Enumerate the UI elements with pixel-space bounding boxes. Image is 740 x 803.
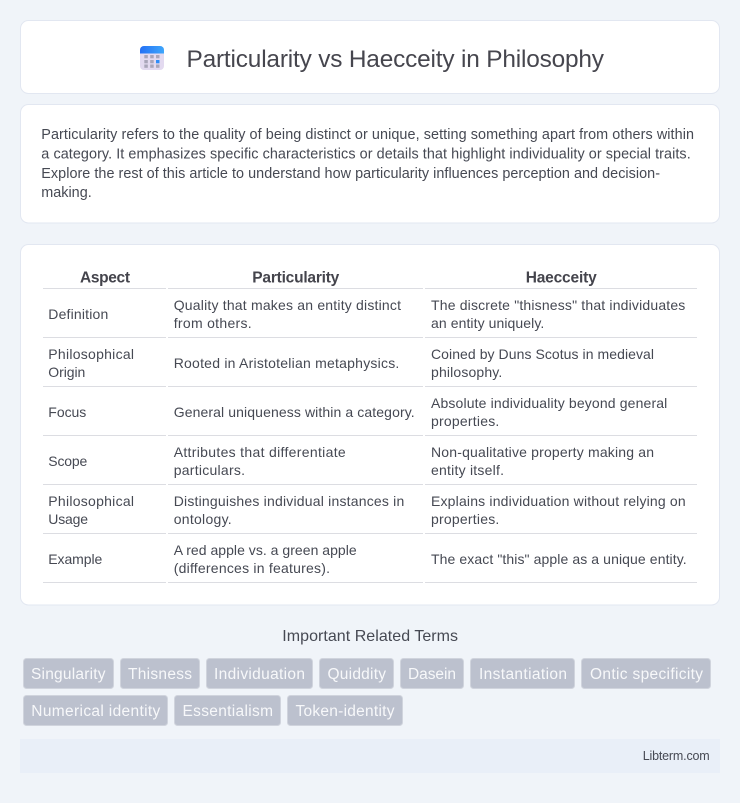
tag: Essentialism — [174, 696, 280, 726]
panel: header — [20, 20, 720, 94]
table row: Focus: Focus — [48, 404, 86, 420]
table row: Philosophical Usage: ontology. — [174, 511, 232, 527]
table row: Scope — [43, 444, 697, 485]
table header row — [43, 270, 697, 289]
table header row: Haecceity — [526, 270, 597, 286]
tag: Individuation: Individuation — [214, 666, 305, 683]
tag: Singularity — [24, 658, 114, 688]
table row: Example: (differences in features). — [174, 560, 330, 576]
table row: Philosophical Usage: properties. — [431, 511, 499, 527]
table row: Example: A red apple vs. a green apple — [174, 542, 357, 558]
table row: Focus: Absolute individuality beyond general — [431, 395, 667, 411]
text block: introduction paragraph: making. — [41, 185, 92, 201]
panel: introduction — [20, 104, 720, 223]
table row: Philosophical Origin — [43, 346, 697, 387]
footer credit: Libterm.com — [643, 749, 710, 763]
tag: Singularity: Singularity — [31, 666, 106, 683]
table row: Philosophical Origin: Philosophical — [48, 346, 134, 362]
icon: calendar — [140, 46, 164, 70]
tag: Dasein — [400, 658, 464, 688]
tag: Individuation — [206, 658, 312, 688]
table row: Philosophical Origin: philosophy. — [431, 364, 502, 380]
table row: Example: The exact "this" apple as a unique entity. — [431, 551, 687, 567]
table row: Philosophical Usage: Distinguishes individual instances in — [174, 493, 404, 509]
tag: Essentialism: Essentialism — [182, 703, 273, 720]
table row: Scope: Non-qualitative property making an — [431, 444, 654, 460]
tag: Ontic specificity — [582, 658, 710, 688]
footer — [20, 739, 720, 773]
table row: Definition: an entity uniquely. — [431, 315, 544, 331]
table row: Scope: Attributes that differentiate — [174, 444, 346, 460]
title: Particularity vs Haecceity in Philosophy — [186, 46, 605, 73]
table row: Philosophical Usage — [43, 493, 697, 534]
tag: Quiddity — [320, 658, 394, 688]
table row: Definition — [43, 297, 697, 338]
table row: Focus: General uniqueness within a category. — [174, 404, 415, 420]
tag: Dasein: Dasein — [408, 666, 456, 683]
tag: Token-identity: Token-identity — [296, 703, 395, 720]
table row: Philosophical Origin: Rooted in Aristotelian metaphysics. — [174, 355, 399, 371]
tag: Numerical identity — [24, 696, 168, 726]
tag: Thisness: Thisness — [128, 666, 192, 683]
table row: Scope: entity itself. — [431, 462, 504, 478]
text block: introduction paragraph — [41, 127, 694, 201]
table header row: Aspect — [80, 270, 130, 286]
tag: Thisness — [120, 658, 200, 688]
table row: Definition: Definition — [48, 306, 108, 322]
tag: Ontic specificity: Ontic specificity — [590, 666, 703, 683]
text block: introduction paragraph: Explore the rest of this article to understand how particularity influences perception and decision- — [41, 166, 660, 182]
table row: Focus — [43, 395, 697, 436]
panel: comparison table — [20, 244, 720, 605]
table row: Philosophical Usage: Usage — [48, 511, 88, 527]
table row: Philosophical Usage: Explains individuation without relying on — [431, 493, 686, 509]
text block: introduction paragraph: a category. It emphasizes specific characteristics or details that highlight individuality or special traits. — [41, 146, 691, 162]
table row: Focus: properties. — [431, 413, 499, 429]
heading: Important Related Terms: Important Related Terms — [282, 628, 458, 645]
table row: Example: Example — [48, 551, 103, 567]
table row: Example — [43, 542, 697, 583]
text block: introduction paragraph: Particularity refers to the quality of being distinct or unique, setting something apart from others within — [41, 127, 694, 143]
table row: Philosophical Origin: Origin — [48, 364, 85, 380]
table row: Scope: Scope — [48, 453, 88, 469]
tag: Instantiation — [470, 658, 574, 688]
tag: Instantiation: Instantiation — [479, 666, 567, 683]
table row: Scope: particulars. — [174, 462, 245, 478]
table row: Definition: from others. — [174, 315, 252, 331]
tags: related terms — [24, 658, 710, 726]
table row: Philosophical Origin: Coined by Duns Scotus in medieval — [431, 346, 654, 362]
table row: Philosophical Usage: Philosophical — [48, 493, 134, 509]
table header row: Particularity — [252, 270, 340, 286]
tag: Token-identity — [288, 696, 402, 726]
table row: Definition: The discrete "thisness" that individuates — [431, 297, 685, 313]
tag: Quiddity: Quiddity — [328, 666, 386, 683]
table row: Definition: Quality that makes an entity distinct — [174, 297, 401, 313]
tag: Numerical identity: Numerical identity — [31, 703, 161, 720]
